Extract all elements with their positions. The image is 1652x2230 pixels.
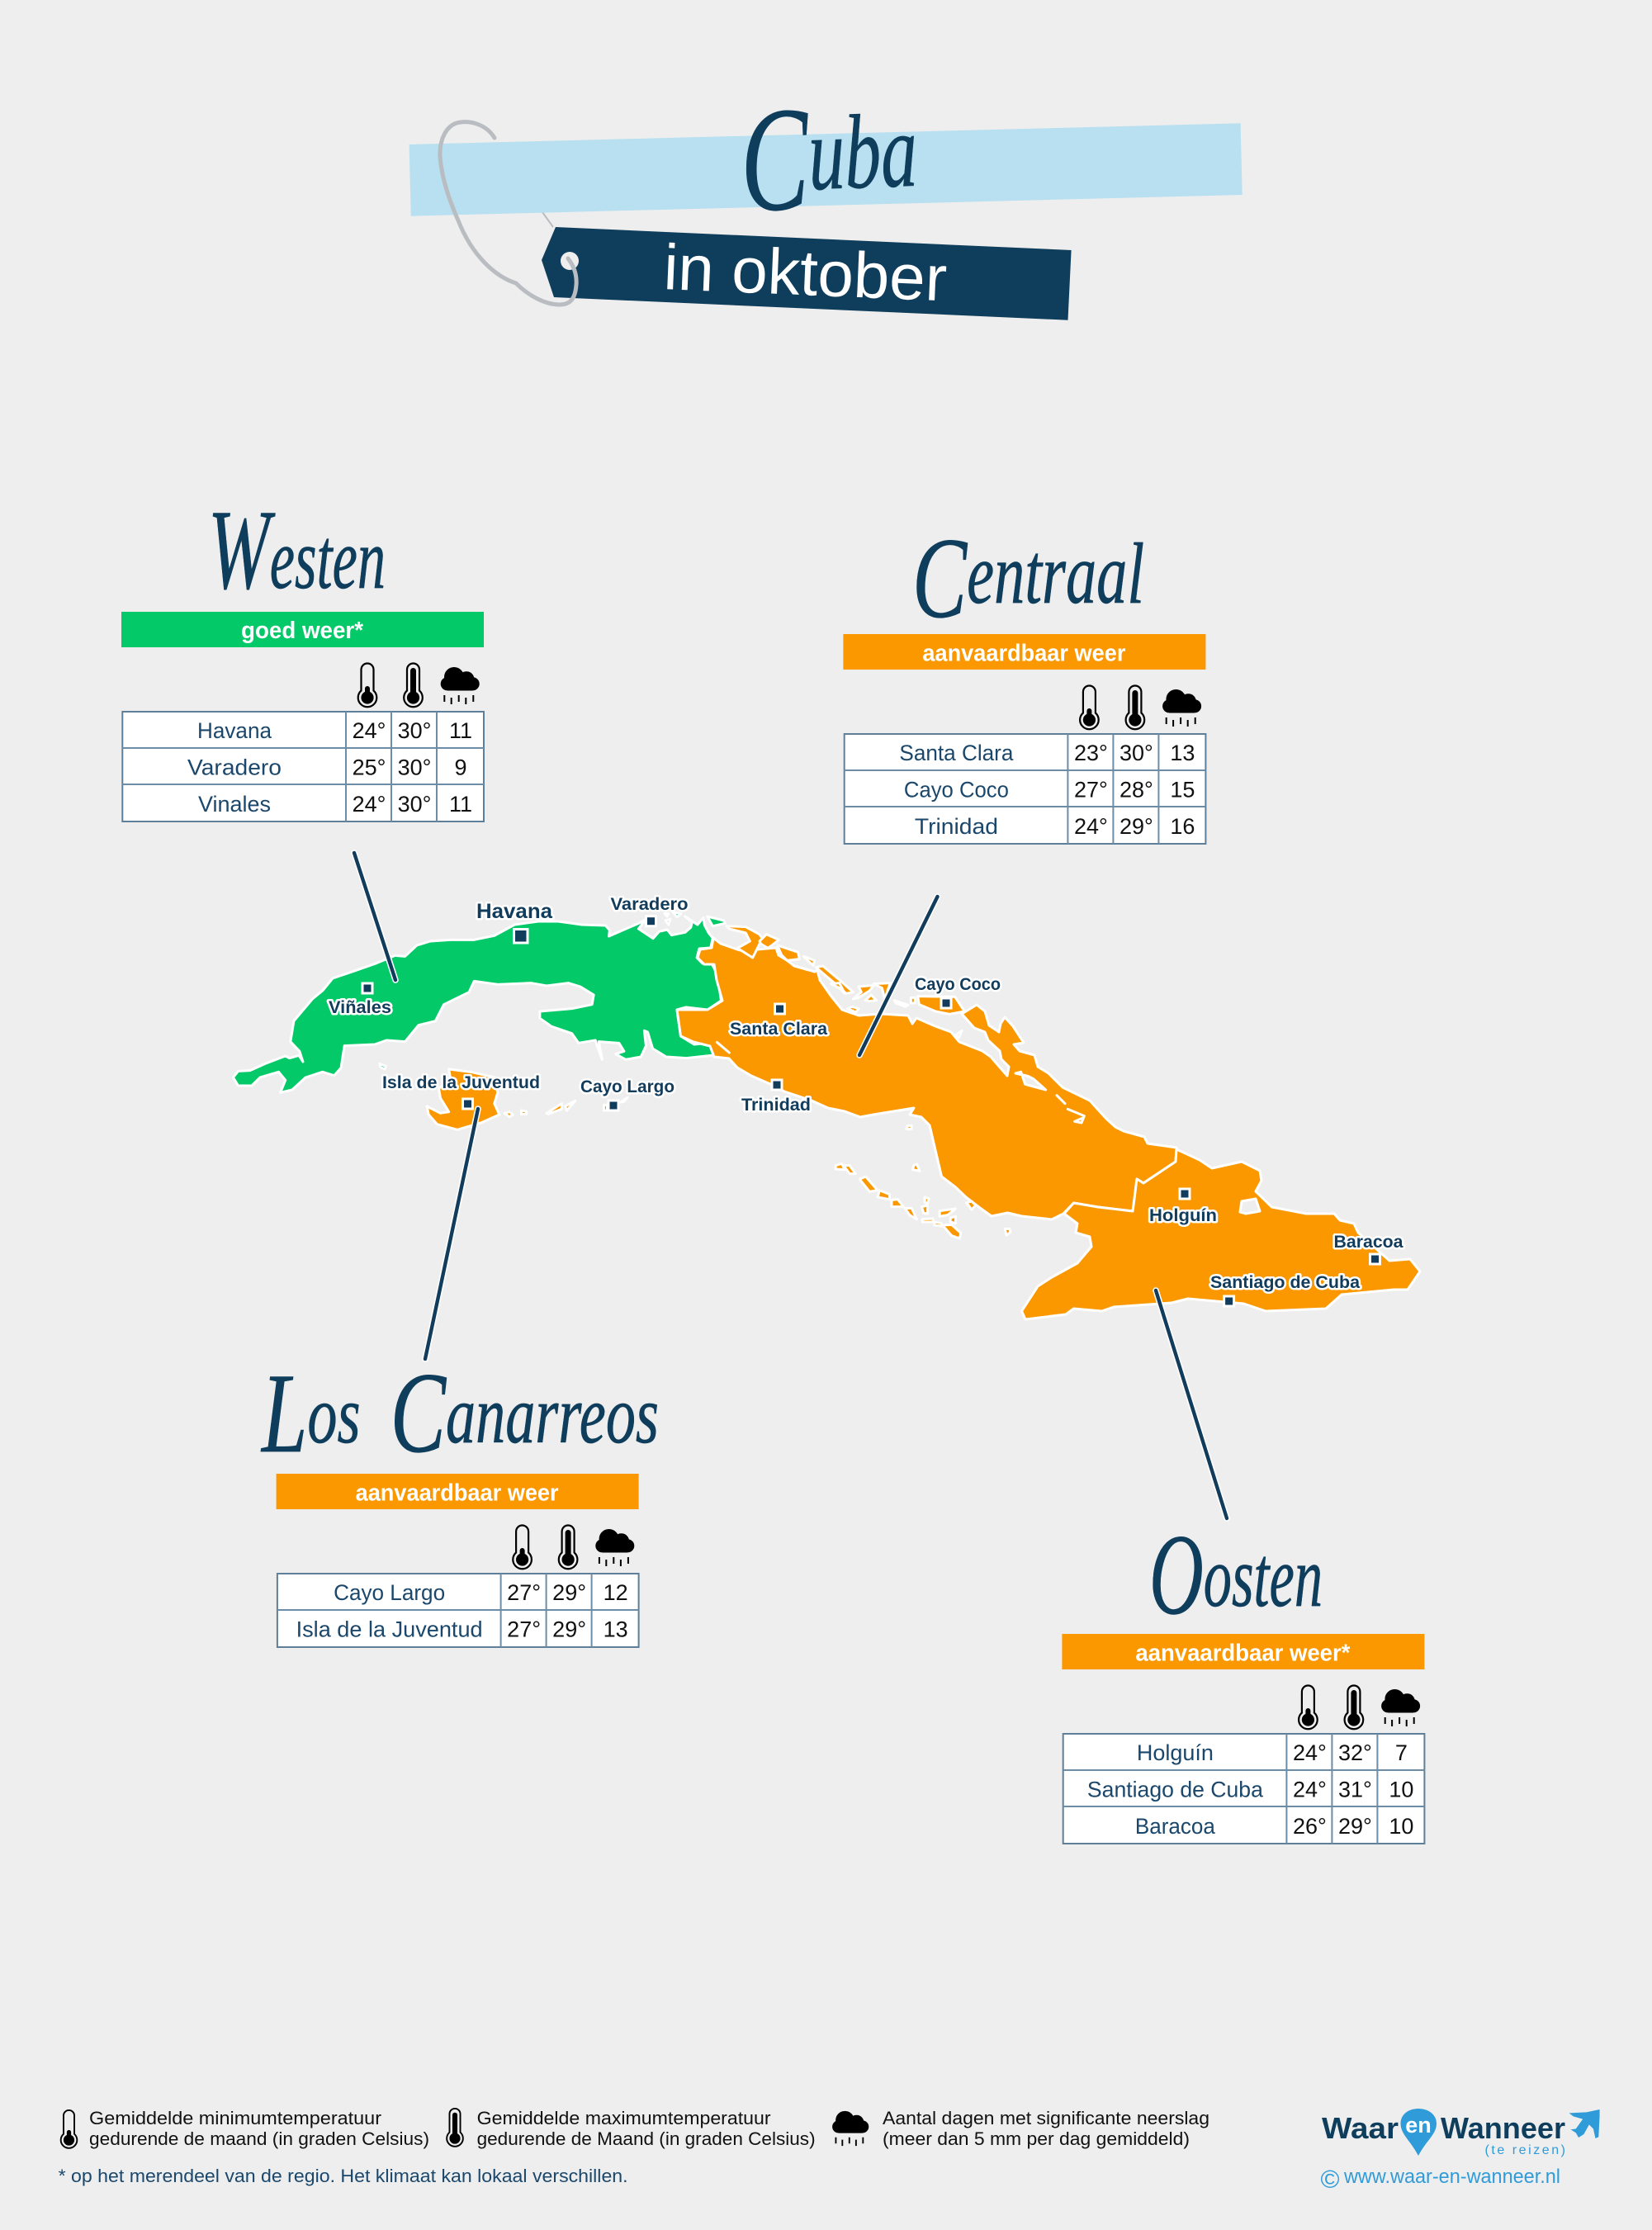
weather panel body	[277, 1474, 639, 1647]
table: Westen: 30°	[398, 792, 431, 817]
region: Los Canarreos islands (orange)	[427, 1069, 627, 1129]
logo tagline: (te reizen)	[1484, 2143, 1565, 2157]
city labels: Cayo Coco	[915, 975, 1001, 994]
table: Los Canarreos: 29°	[552, 1580, 586, 1605]
logo word: Wanneer: Wanneer	[1441, 2111, 1565, 2145]
copyright mark: ©	[1321, 2165, 1340, 2194]
panel: Los Canarreos	[261, 1349, 659, 1647]
table: Westen: 9	[454, 755, 467, 779]
panel: Oosten	[1062, 1511, 1424, 1844]
table: Los Canarreos: 13	[604, 1617, 628, 1641]
weather panel body	[843, 634, 1205, 844]
table: Westen	[122, 712, 484, 821]
weather badge: aanvaardbaar weer: aanvaardbaar weer	[922, 641, 1125, 667]
city labels: Viñales	[329, 998, 391, 1017]
legend text: precipitation: Aantal dagen met significante neerslag	[883, 2108, 1209, 2128]
city markers	[362, 916, 1380, 1306]
southern keys (orange)	[835, 1125, 1011, 1238]
icons: columns	[358, 664, 480, 707]
weather badge: aanvaardbaar weer: aanvaardbaar weer	[356, 1480, 559, 1506]
navy tag	[542, 227, 1072, 320]
leader line: east	[1156, 1290, 1227, 1518]
table: Oosten	[1063, 1734, 1424, 1844]
northern keys (orange)	[717, 926, 1084, 1123]
heading: Centraal: C	[912, 514, 968, 642]
icons: columns	[1299, 1686, 1420, 1729]
weather badge: goed weer: goed weer*	[241, 618, 364, 644]
table: Westen: 30°	[398, 718, 431, 743]
legend text: maximum temperature: Gemiddelde maximumtemperatuur	[477, 2108, 771, 2128]
tag hole	[561, 252, 579, 270]
weather panel body	[1062, 1634, 1424, 1844]
logo word: en: en	[1405, 2113, 1432, 2138]
table: Westen: 24°	[353, 718, 386, 743]
table: Los Canarreos: 29°	[552, 1617, 586, 1641]
city labels: Isla de la Juventud	[382, 1073, 540, 1092]
table: Oosten: Santiago de Cuba	[1087, 1777, 1264, 1802]
table: Oosten: 10	[1389, 1777, 1413, 1802]
table: Centraal: 29°	[1119, 814, 1153, 839]
weather badge: goed weer	[121, 612, 484, 647]
table: Oosten: 31°	[1338, 1777, 1372, 1802]
city labels: Santa Clara	[730, 1020, 827, 1039]
table: Westen: 11	[449, 792, 472, 817]
logo: Waar en Wanneer	[1321, 2109, 1600, 2194]
table: Westen: 24°	[353, 792, 386, 817]
legend text: minimum temperature: gedurende de maand (in graden Celsius)	[89, 2128, 429, 2149]
icons: columns	[513, 1526, 634, 1569]
light blue title band	[409, 123, 1243, 216]
city labels: Varadero	[611, 895, 689, 914]
table: Oosten: 7	[1395, 1740, 1408, 1765]
panel: Centraal	[843, 514, 1205, 844]
thin tag string	[542, 212, 553, 227]
table: Westen: Havana	[197, 718, 272, 743]
icon: precipitation	[832, 2111, 869, 2146]
table: Oosten: Holguín	[1137, 1740, 1214, 1765]
table: Oosten: 24°	[1293, 1740, 1327, 1765]
table: Centraal: 30°	[1119, 741, 1153, 765]
legend text: maximum temperature: gedurende de Maand (in graden Celsius)	[477, 2128, 816, 2149]
region: west (green)	[233, 912, 725, 1092]
table: Los Canarreos: Isla de la Juventud	[296, 1617, 483, 1641]
heading: Westen: Westen	[208, 486, 386, 613]
city labels: Havana	[476, 900, 553, 923]
footnote: * op het merendeel van de regio. Het klimaat kan lokaal verschillen.	[59, 2166, 628, 2186]
table: Centraal: 13	[1170, 741, 1195, 765]
table: Centraal: Santa Clara	[899, 741, 1014, 765]
legend text: maximum temperature	[477, 2108, 816, 2149]
icon: map pin	[1400, 2109, 1437, 2156]
table: Los Canarreos: Cayo Largo	[334, 1580, 445, 1605]
weather badge: aanvaardbaar weer*	[1062, 1634, 1424, 1669]
city labels: Baracoa	[1334, 1233, 1403, 1252]
legend text: precipitation: (meer dan 5 mm per dag gemiddeld)	[883, 2128, 1190, 2149]
panel: Westen	[121, 486, 484, 821]
subtitle: in oktober	[662, 230, 949, 315]
legend text: precipitation	[883, 2108, 1209, 2149]
table: Oosten: 10	[1389, 1814, 1413, 1839]
table: Centraal	[844, 734, 1205, 844]
table: Oosten: 29°	[1338, 1814, 1372, 1839]
map of Cuba	[233, 912, 1420, 1319]
bay	[1240, 1199, 1260, 1214]
legend text: minimum temperature	[89, 2108, 429, 2149]
website: www.waar-en-wanneer.nl	[1343, 2166, 1560, 2188]
heading: Los Canarreos: C	[391, 1349, 447, 1477]
icon: minimum temperature	[61, 2110, 77, 2148]
city labels: Cayo Largo	[580, 1077, 675, 1096]
table: Oosten: 32°	[1338, 1740, 1372, 1765]
weather badge: aanvaardbaar weer	[843, 634, 1205, 670]
heading: Los Canarreos: L	[261, 1350, 307, 1476]
title: Cuba: uba	[807, 92, 919, 212]
city labels: Holguín	[1149, 1206, 1217, 1225]
table: Centraal: Trinidad	[915, 814, 998, 839]
table: Oosten: 26°	[1293, 1814, 1327, 1839]
table: Los Canarreos: 27°	[507, 1617, 541, 1641]
table: Centraal: 23°	[1074, 741, 1108, 765]
table: Centraal: Cayo Coco	[904, 778, 1009, 803]
city labels	[329, 895, 1403, 1292]
heading: Centraal: entraal	[967, 525, 1144, 622]
weather badge: aanvaardbaar weer	[277, 1474, 639, 1509]
table: Westen: Vinales	[198, 792, 271, 817]
table: Westen: 11	[449, 718, 472, 743]
leader line: central	[859, 897, 938, 1055]
city labels: Trinidad	[741, 1096, 811, 1115]
leader line: Los Canarreos	[425, 1109, 478, 1359]
table: Westen: 30°	[398, 755, 431, 779]
logo word: Waar: Waar	[1322, 2111, 1399, 2145]
heading: Oosten: O	[1149, 1511, 1204, 1639]
weather badge: aanvaardbaar weer*: aanvaardbaar weer*	[1135, 1640, 1351, 1666]
leader line: west	[354, 853, 395, 980]
table: Los Canarreos: 27°	[507, 1580, 541, 1605]
table: Los Canarreos	[277, 1574, 639, 1647]
heading: Los Canarreos: anarreos	[446, 1369, 659, 1461]
table: Centraal: 15	[1170, 778, 1195, 803]
icon: airplane	[1569, 2109, 1600, 2138]
grey ring	[440, 122, 576, 305]
title: Cuba: C	[737, 76, 812, 243]
table: Centraal: 28°	[1119, 778, 1153, 803]
table: Centraal: 27°	[1074, 778, 1108, 803]
city labels: Santiago de Cuba	[1210, 1273, 1360, 1292]
legend text: minimum temperature: Gemiddelde minimumtemperatuur	[89, 2108, 381, 2128]
icon: maximum temperature	[447, 2109, 463, 2147]
region: east (orange)	[1022, 1149, 1420, 1319]
table: Centraal: 16	[1170, 814, 1195, 839]
table: Oosten: 24°	[1293, 1777, 1327, 1802]
title banner	[409, 73, 1243, 320]
table: Westen: Varadero	[187, 755, 282, 779]
icons: columns	[1080, 686, 1201, 729]
table: Centraal: 24°	[1074, 814, 1108, 839]
heading: Los Canarreos: os	[307, 1369, 391, 1461]
region: central (orange)	[677, 938, 1176, 1219]
table: Los Canarreos: 12	[604, 1580, 628, 1605]
table: Oosten: Baracoa	[1135, 1814, 1216, 1839]
table: Westen: 25°	[353, 755, 386, 779]
heading: Oosten: osten	[1204, 1528, 1323, 1625]
legend	[59, 2108, 1209, 2186]
